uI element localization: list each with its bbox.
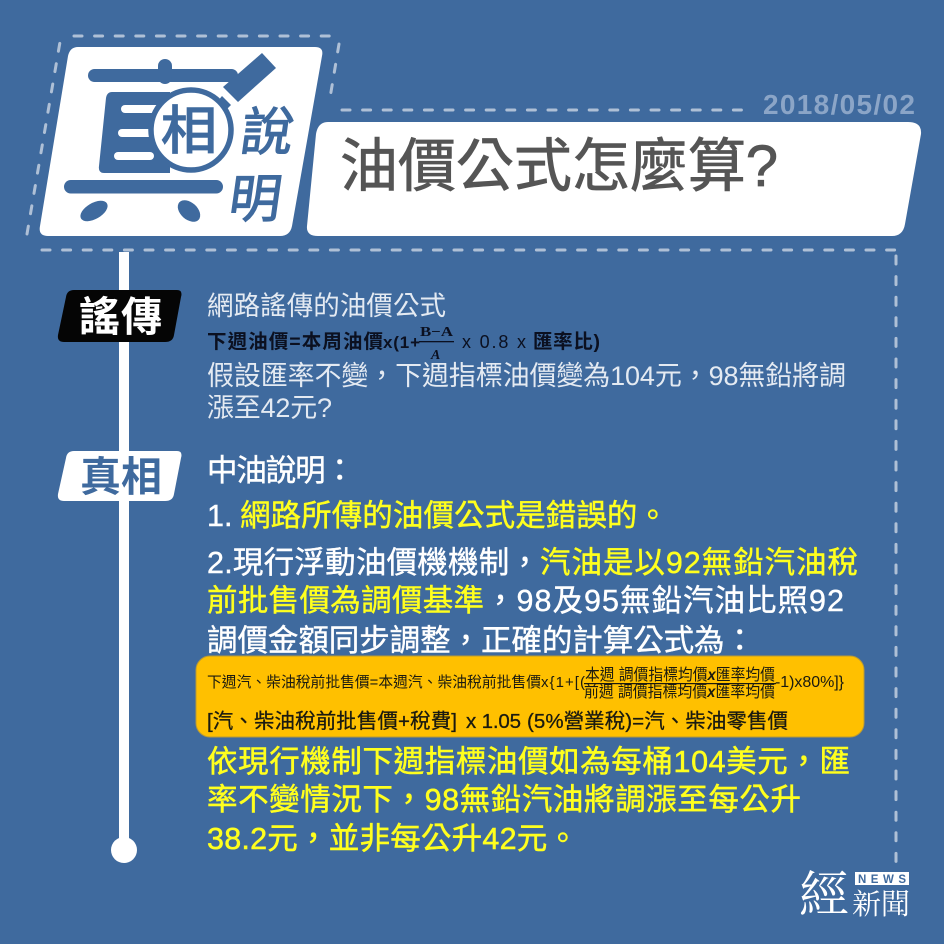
date: 2018/05/02 (763, 89, 915, 120)
formula line 1: 下週汽、柴油稅前批售價=本週汽、柴油稅前批售價 (207, 674, 541, 691)
rumor formula: A (430, 348, 440, 363)
formula line 2: (5%營業稅)=汽、柴油零售價 (527, 710, 788, 733)
rumor formula: x 0.8 x (462, 332, 526, 352)
logo panel: 真相說明 (40, 47, 322, 236)
point 2: 2.現行浮動油價機機制， (207, 546, 540, 580)
logo text: 明: 明 (225, 171, 285, 229)
formula line 1: -1)x80%]} (775, 674, 845, 691)
formula box (196, 656, 864, 737)
formula line 1: x{1+[( (541, 674, 585, 691)
formula line 2: x 1.05 (466, 710, 521, 733)
brand logo: 經 news 新聞: 經 (799, 855, 849, 927)
timeline: vertical line with end dot (111, 252, 137, 863)
title text: 油價公式怎麼算? (340, 134, 778, 199)
icon: character 真 with magnifying glass (64, 53, 276, 226)
point 2 (207, 546, 858, 658)
conclusion text: 率不變情況下，98無鉛汽油將調漲至每公升 (207, 783, 801, 817)
point 2: 調價金額同步調整，正確的計算公式為： (207, 624, 755, 658)
brand logo: 經 news 新聞 (799, 855, 910, 927)
rumor tag (58, 290, 182, 342)
conclusion text: 依現行機制下週指標油價如為每桶104美元，匯 (207, 745, 850, 779)
title panel (307, 122, 921, 236)
truth heading: 中油說明： (207, 454, 355, 488)
point 2: ，98及95無鉛汽油比照92 (485, 584, 844, 618)
brand logo: 經 news 新聞: 新聞 (852, 882, 910, 923)
rumor text (207, 291, 846, 423)
truth tag (58, 451, 182, 501)
formula line 1 (207, 666, 845, 701)
rumor question: 假設匯率不變，下週指標油價變為104元，98無鉛將調 (207, 361, 846, 391)
truth text (207, 454, 858, 658)
conclusion text (207, 745, 850, 856)
rumor formula: 下週油價=本周油價 (207, 331, 383, 353)
formula line 1: 本週 調價指標均價x匯率均價 (585, 666, 775, 684)
point 2: 前批售價為調價基準 (207, 584, 484, 618)
logo text: 說: 說 (237, 104, 297, 162)
truth tag: 真相 (80, 454, 162, 500)
logo text: 相: 相 (161, 103, 217, 161)
point 1: 網路所傳的油價公式是錯誤的。 (240, 499, 668, 533)
formula line 2 (207, 710, 788, 733)
conclusion text: 38.2元，並非每公升42元。 (207, 822, 578, 856)
point 1: 1. (207, 499, 232, 533)
rumor formula: 匯率比) (533, 331, 600, 353)
rumor tag: 謠傳 (79, 294, 162, 340)
point 2: 汽油是以92無鉛汽油稅 (540, 546, 858, 580)
rumor formula (207, 325, 600, 363)
rumor text: 漲至42元? (207, 393, 332, 423)
rumor formula: x(1+ (383, 333, 420, 352)
formula line 1: 前週 調價指標均價x匯率均價 (584, 683, 775, 701)
formula line 2: [汽、柴油稅前批售價+稅費] (207, 710, 457, 733)
rumor formula: B−A (420, 325, 454, 340)
rumor heading: 網路謠傳的油價公式 (207, 291, 446, 321)
brand logo: 經 news 新聞: NEWS (858, 874, 906, 886)
